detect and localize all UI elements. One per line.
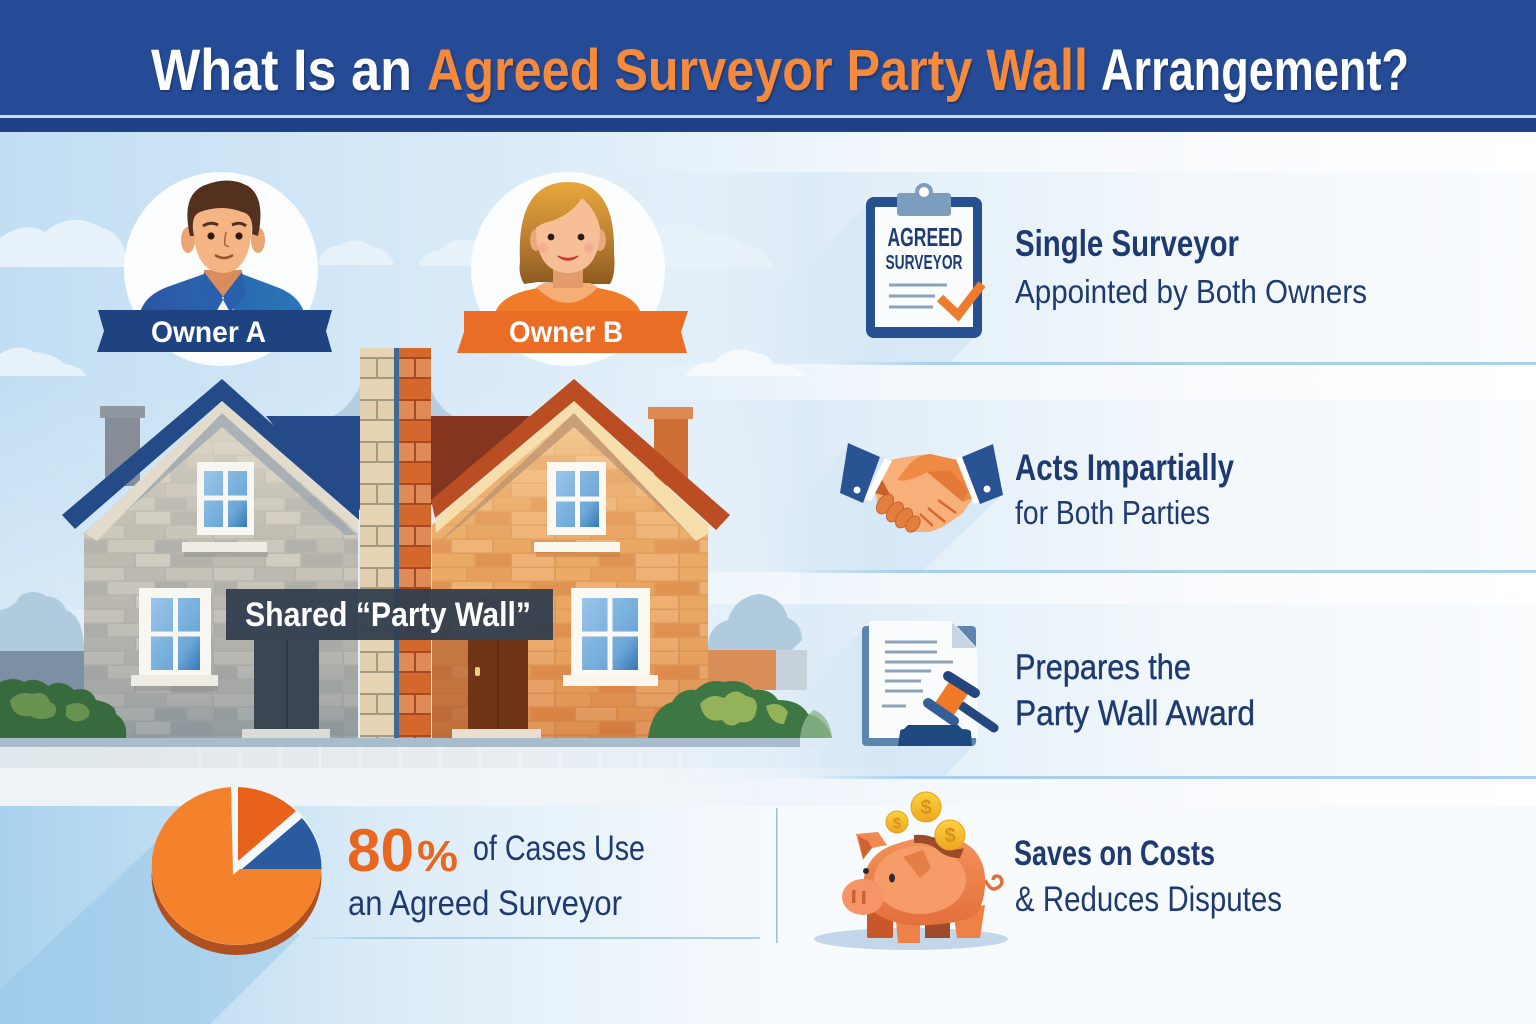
clouds <box>0 220 808 376</box>
icon: agreed surveyor clipboard <box>866 185 982 338</box>
owner B <box>457 172 688 366</box>
right roof <box>431 379 730 545</box>
title: Agreed Surveyor Party Wall <box>427 38 1088 103</box>
icon: agreed surveyor clipboard: AGREED <box>888 222 962 252</box>
house <box>62 348 730 738</box>
text: single surveyor: Appointed by Both Owners <box>1015 273 1367 310</box>
label: shared party wall: Shared “Party Wall” <box>245 596 531 634</box>
owner A <box>97 172 332 366</box>
text: acts impartially: Acts Impartially <box>1015 447 1234 488</box>
icon: handshake <box>840 443 1003 535</box>
ribbon: Owner A: Owner A <box>151 316 266 349</box>
text: acts impartially <box>1015 447 1234 531</box>
shadow slivers by party wall <box>333 386 453 416</box>
icon: agreed surveyor clipboard: SURVEYOR <box>886 252 963 274</box>
icon: piggy bank: $ <box>920 797 932 819</box>
title: Arrangement? <box>1101 38 1409 103</box>
icon: award and gavel <box>862 621 994 746</box>
windows right <box>534 462 658 686</box>
lower right window <box>563 588 658 686</box>
text: single surveyor: Single Surveyor <box>1015 223 1239 264</box>
text: saves on costs <box>1014 834 1282 919</box>
text: single surveyor <box>1015 223 1367 310</box>
bushes <box>0 679 832 738</box>
avatar A <box>124 172 318 366</box>
avatar B <box>471 172 665 366</box>
icon: piggy bank: $ <box>944 825 956 847</box>
stat text: 80 percent <box>347 817 645 923</box>
stat text: 80 percent: % <box>417 832 458 881</box>
right back roof <box>431 416 530 505</box>
left roof <box>62 379 359 541</box>
doors <box>242 640 541 738</box>
ribbon: Owner B <box>457 311 688 353</box>
title <box>151 38 1409 103</box>
left back roof <box>266 416 360 510</box>
text: saves on costs: Saves on Costs <box>1014 834 1215 873</box>
icon: piggy bank: $ <box>893 815 902 832</box>
title banner <box>0 0 1536 132</box>
windows left <box>131 462 268 691</box>
text: saves on costs: & Reduces Disputes <box>1015 880 1282 919</box>
label: shared party wall <box>226 589 553 640</box>
right chimney <box>648 407 693 486</box>
ribbon: Owner B: Owner B <box>509 316 623 349</box>
left wall <box>84 410 358 738</box>
stat text: 80 percent: an Agreed Surveyor <box>348 884 622 923</box>
left chimney <box>100 406 145 486</box>
upper left window <box>182 462 268 557</box>
right wall <box>432 410 708 738</box>
lower left window <box>131 588 218 691</box>
text: prepares the award: Party Wall Award <box>1015 694 1255 733</box>
icon: piggy bank <box>814 792 1008 950</box>
title: What Is an <box>151 38 412 103</box>
background trees and fence <box>0 592 807 691</box>
text: acts impartially: for Both Parties <box>1015 494 1210 531</box>
pavement <box>0 738 820 768</box>
upper right window <box>534 462 620 557</box>
stat text: 80 percent: of Cases Use <box>473 829 645 868</box>
text: prepares the award <box>1015 648 1255 733</box>
text: prepares the award: Prepares the <box>1015 648 1191 687</box>
party wall column <box>360 348 431 738</box>
ribbon: Owner A <box>97 310 332 352</box>
pie chart: 80% <box>152 787 322 955</box>
stat text: 80 percent: 80 <box>347 817 414 884</box>
